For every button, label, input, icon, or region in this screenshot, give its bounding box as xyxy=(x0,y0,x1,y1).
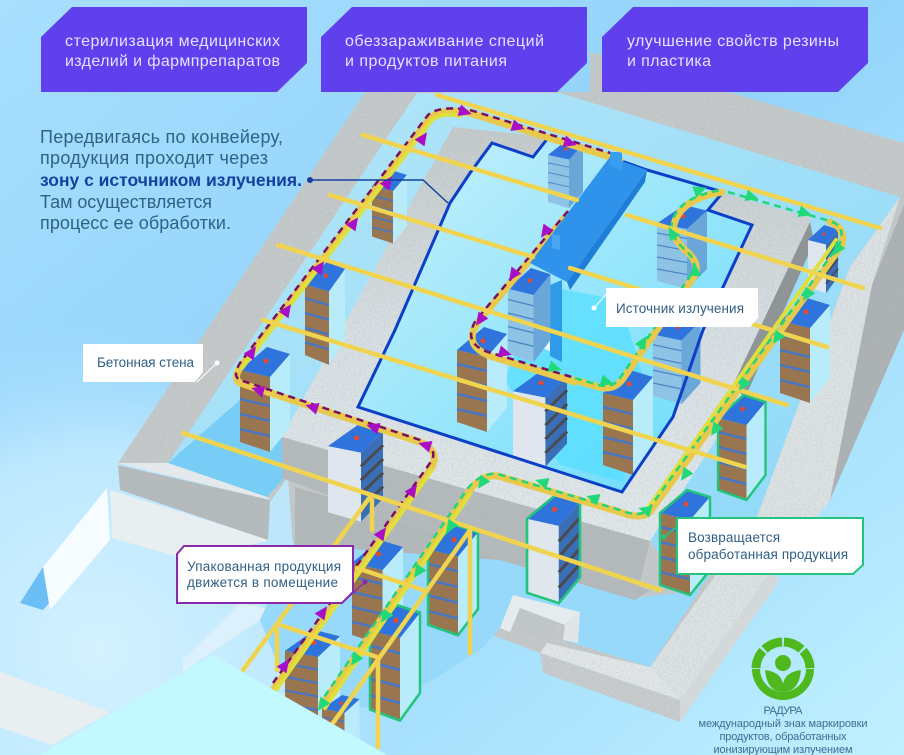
label: concrete wall xyxy=(83,344,220,382)
inner pool with ice back wall xyxy=(168,93,900,600)
green direction arrows xyxy=(313,182,845,714)
label: radiation source: Источник излучения xyxy=(616,301,744,316)
Radura caption: международный знак маркировки xyxy=(698,718,868,730)
intro text block: Передвигаясь по конвейеру, xyxy=(40,127,283,147)
blue zone outline xyxy=(358,138,752,492)
floor between walls xyxy=(260,543,700,720)
emitter beam xyxy=(530,152,647,290)
pool floor on left xyxy=(168,400,290,497)
Radura caption xyxy=(698,705,868,755)
callout line to radiation zone xyxy=(307,177,448,203)
card: disinfection: обеззараживание специй xyxy=(345,33,544,50)
card: rubber and plastic: улучшение свойств резины xyxy=(627,33,839,50)
label: radiation source xyxy=(592,288,758,327)
lower-left white walls xyxy=(0,320,430,755)
Radura caption: продуктов, обработанных xyxy=(720,731,847,743)
label: packaged product: Упакованная продукция xyxy=(187,559,341,574)
card: rubber and plastic: и пластика xyxy=(627,53,711,70)
label: packaged product: движется в помещение xyxy=(187,575,338,590)
card: sterilization: изделий и фармпрепаратов xyxy=(65,53,280,70)
intro text block: процесс ее обработки. xyxy=(40,213,231,233)
label: processed product returns: обработанная продукция xyxy=(688,547,848,562)
front L wall xyxy=(540,643,680,700)
right outer face xyxy=(790,205,904,500)
packaged product conveyor route xyxy=(236,108,620,690)
label: processed product returns xyxy=(662,518,863,574)
intro text block: Там осуществляется xyxy=(40,192,212,212)
small return wall xyxy=(510,608,560,640)
card: sterilization: стерилизация медицинских xyxy=(65,33,280,50)
label: packaged product xyxy=(177,546,368,603)
conveyor cross beams xyxy=(183,95,880,747)
card: disinfection xyxy=(321,7,587,92)
central island xyxy=(282,127,812,541)
magenta direction arrows xyxy=(244,105,578,673)
intro text block xyxy=(40,127,302,233)
card: rubber and plastic xyxy=(602,7,868,92)
left wall front faces xyxy=(118,465,270,540)
Radura caption: РАДУРА xyxy=(764,705,803,717)
label: concrete wall: Бетонная стена xyxy=(97,355,194,370)
storage racks xyxy=(240,140,838,755)
foreground cyan block xyxy=(40,655,387,755)
radiation zone with blue outline xyxy=(358,138,752,492)
processed product conveyor route xyxy=(320,190,843,708)
intro text block: продукция проходит через xyxy=(40,148,268,168)
label: processed product returns: Возвращается xyxy=(688,530,780,545)
intro text block: зону с источником излучения. xyxy=(40,170,302,190)
card: disinfection: и продуктов питания xyxy=(345,53,507,70)
outer concrete wall xyxy=(118,52,904,700)
right wall top xyxy=(650,197,900,700)
card: sterilization xyxy=(41,7,307,92)
icon: Radura mark xyxy=(752,642,814,700)
